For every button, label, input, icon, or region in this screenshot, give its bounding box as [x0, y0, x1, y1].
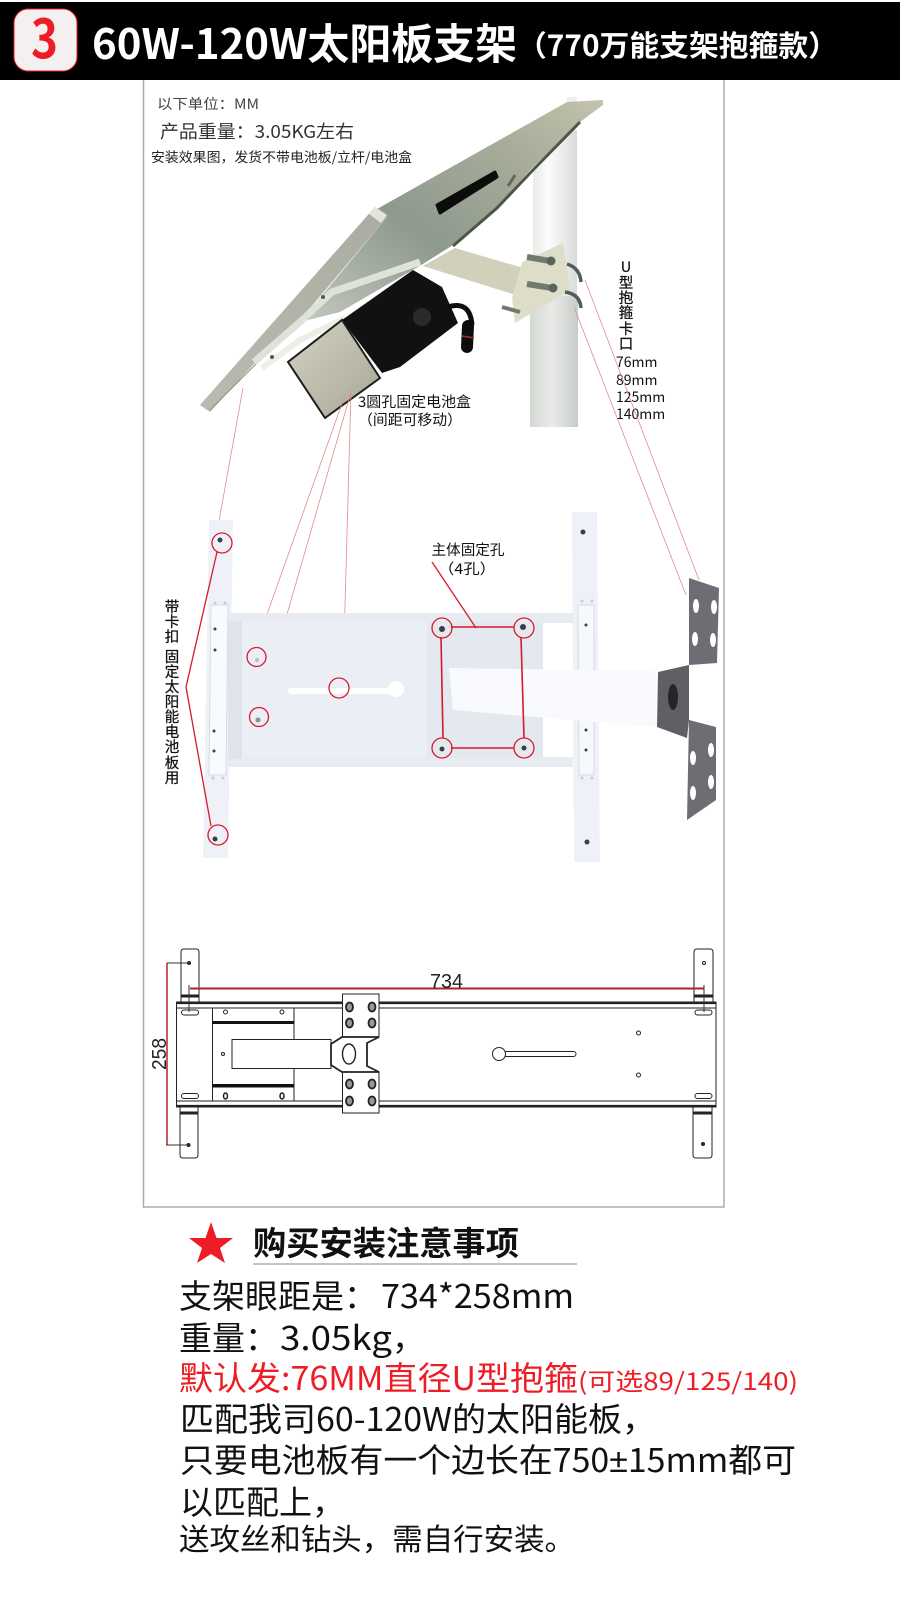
note: hole spacing: 734*258mm: [381, 1270, 574, 1318]
note: default clamp: [179, 1352, 798, 1400]
left rail: [203, 520, 233, 858]
rail tabs: [180, 949, 713, 1158]
note: compatibility: 匹配我司60-120W的太阳能板，: [180, 1393, 656, 1441]
main frame panel: [144, 80, 724, 1207]
text: clip label vertical: 板: [165, 752, 180, 773]
text: U-clamp sizes: 89mm: [616, 370, 657, 390]
text: clip label vertical: 带: [165, 596, 179, 617]
text: U-clamp sizes: 125mm: [616, 387, 665, 407]
text: U-clamp label: 箍: [619, 302, 633, 323]
technical drawing: [149, 949, 716, 1158]
text: clip label vertical: 卡: [165, 611, 179, 632]
text: U-clamp label: 型: [619, 272, 633, 293]
arm: [449, 668, 656, 727]
leader lines: [217, 280, 699, 708]
text: U-clamp label: [619, 256, 633, 354]
dimension 258: 258: [149, 1038, 171, 1070]
icon: red star: [189, 1222, 233, 1263]
text: clip label vertical: 池: [165, 736, 179, 757]
arm and clamp: [232, 994, 379, 1113]
text: clip label vertical: 固: [165, 646, 179, 667]
red markers: [186, 533, 534, 845]
note: included accessories: 送攻丝和钻头，需自行安装。: [179, 1515, 575, 1559]
note: weight: 重量：: [179, 1312, 278, 1360]
text: U-clamp label: U: [621, 256, 631, 277]
text: main fixing holes label: [432, 539, 505, 579]
note: weight: [179, 1312, 425, 1360]
text: unit note: 以下单位：MM: [157, 94, 259, 114]
text: 3-hole note: （间距可移动）: [358, 409, 462, 430]
text: U-clamp label: 卡: [619, 318, 633, 339]
dimension 734: 734: [430, 971, 463, 993]
panel back: [200, 100, 603, 412]
pole: [530, 97, 578, 427]
note: weight: ，: [392, 1312, 425, 1360]
right rail: [572, 512, 600, 862]
bracket photo: [186, 512, 719, 862]
header bar: [0, 0, 900, 80]
text: U-clamp label: 抱: [619, 287, 633, 308]
text: clip label vertical: 太: [165, 676, 180, 697]
heading: 购买安装注意事项: [253, 1217, 519, 1265]
number badge: [14, 0, 77, 74]
text: U-clamp sizes: [616, 352, 665, 424]
text: clip label vertical: 定: [165, 661, 179, 682]
subtitle: （770万能支架抱箍款）: [517, 23, 838, 65]
arm and mounting plate: [423, 243, 581, 323]
note: weight: 3.05kg: [280, 1312, 392, 1360]
plate: [228, 613, 573, 767]
text: 3-hole note: [358, 391, 472, 430]
text: clip label vertical: [165, 596, 180, 788]
text: U-clamp sizes: 76mm: [616, 352, 657, 372]
note: hole spacing: 支架眼距是：: [179, 1270, 377, 1318]
dimension lines: [166, 963, 704, 1145]
text: product weight: 产品重量：3.05KG左右: [160, 118, 354, 144]
plate outline: [176, 1002, 716, 1107]
bolt holes: [212, 530, 590, 844]
text: clip label vertical: 电: [165, 721, 179, 742]
text: clip label vertical: 扣: [165, 626, 179, 647]
text: main fixing holes label: （4孔）: [438, 558, 496, 579]
note: hole spacing: [179, 1270, 574, 1318]
note: panel length: 只要电池板有一个边长在750 ±15mm都可: [180, 1434, 796, 1482]
text: U-clamp sizes: 140mm: [616, 404, 665, 424]
keyhole slot: [182, 962, 712, 1146]
text: installation note: 安装效果图，发货不带电池板/立杆/电池盒: [151, 146, 413, 166]
battery box: [288, 270, 474, 418]
text: clip label vertical: 阳: [165, 691, 179, 712]
text: U-clamp label: 口: [619, 333, 633, 354]
text: 3-hole note: 3圆孔固定电池盒: [358, 391, 472, 412]
gray clamp bracket: [657, 578, 719, 820]
heading underline: [253, 1263, 577, 1265]
text: main fixing holes label: 主体固定孔: [432, 539, 505, 560]
product photo: solar panel on pole: [200, 97, 603, 427]
note: default clamp: (可选89/125/140): [578, 1362, 798, 1397]
text: clip label vertical: 能: [165, 706, 179, 727]
title: 60W-120W太阳板支架: [92, 11, 517, 72]
text: clip label vertical: 用: [165, 767, 179, 788]
note: default clamp: 默认发:76MM直径U型抱箍: [179, 1352, 578, 1400]
note: panel length continued: 以匹配上，: [180, 1476, 345, 1524]
notes section: [179, 1217, 798, 1559]
